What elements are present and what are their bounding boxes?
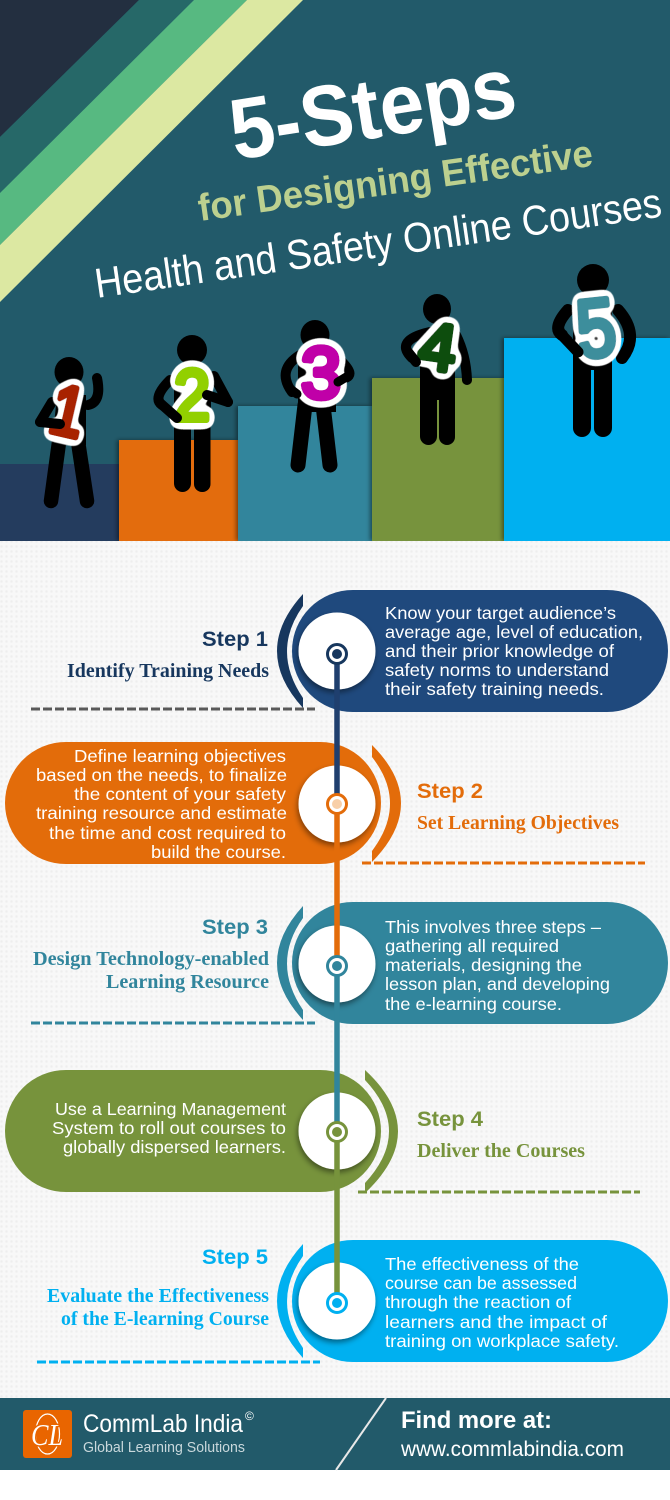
step 5 body: through the reaction of: [385, 1292, 571, 1312]
step 1 body: average age, level of education,: [385, 622, 643, 642]
find more text: [400, 1407, 624, 1461]
panel: step 3: [31, 902, 668, 1024]
panel: step 4: [5, 1070, 640, 1193]
logo: [23, 1410, 72, 1458]
step 2 body: build the course.: [151, 842, 286, 862]
step 3 subtitle: [33, 948, 269, 993]
panel: step 5: [37, 1240, 668, 1362]
step 1 subtitle: Identify Training Needs: [67, 660, 269, 682]
figure 2 holding number 2: 2: [174, 355, 210, 436]
footer band: [0, 1398, 670, 1470]
step 3 subtitle: Design Technology-enabled: [33, 948, 269, 970]
brand name: CommLab India: [83, 1410, 243, 1438]
step 3 body: the e-learning course.: [385, 994, 562, 1014]
step 5 arc: [277, 1244, 303, 1358]
step 2 subtitle: Set Learning Objectives: [417, 812, 619, 834]
step 1 heading: Step 1: [202, 628, 268, 651]
step 1 body: their safety training needs.: [385, 679, 604, 699]
step 4 heading: Step 4: [417, 1108, 483, 1131]
step 1 arc: [277, 594, 303, 708]
step 5 body: learners and the impact of: [385, 1312, 607, 1332]
step 4 subtitle: Deliver the Courses: [417, 1140, 585, 1162]
dotted content background: [0, 541, 670, 1398]
step 5 subtitle: [47, 1285, 269, 1330]
step 5 dashed rule: [37, 1360, 320, 1364]
step 3 body: This involves three steps –: [385, 917, 601, 937]
step 1 body: Know your target audience’s: [385, 603, 616, 623]
subtitle: for Designing Effective: for Designing Effective: [195, 133, 595, 230]
find more text: Find more at:: [401, 1407, 552, 1434]
step 5 body: course can be assessed: [385, 1273, 577, 1293]
panel: step 1: [31, 590, 668, 712]
step 3 body: materials, designing the: [385, 955, 582, 975]
step 3 body: lesson plan, and developing: [385, 974, 610, 994]
step 2 body: Define learning objectives: [74, 746, 286, 766]
step 4 body: [52, 1099, 286, 1157]
find more text: www.commlabindia.com: [400, 1438, 624, 1461]
step 2 heading: Step 2: [417, 780, 483, 803]
step 3 body: [385, 917, 610, 1014]
step 3 subtitle: Learning Resource: [106, 971, 269, 993]
footer slash divider: [336, 1398, 386, 1470]
step 2 dashed rule: [362, 862, 645, 864]
step 5 subtitle: of the E-learning Course: [61, 1308, 269, 1330]
step 1 dashed rule: [31, 708, 315, 710]
step 2 body: training resource and estimate: [36, 803, 287, 823]
step 4 dashed rule: [358, 1190, 640, 1194]
step 1 body: [385, 603, 643, 699]
staircase bars: [0, 338, 670, 541]
step 1 body: safety norms to understand: [385, 660, 609, 680]
figure 5 holding number 5: [558, 264, 630, 437]
step 5 body: training on workplace safety.: [385, 1331, 619, 1351]
figure 2 holding number 2: [158, 335, 228, 492]
step 4 body: globally dispersed learners.: [63, 1137, 286, 1157]
step 2 body: the content of your safety: [74, 784, 286, 804]
logo: CL: [31, 1417, 63, 1452]
figure 4 holding number 4: [406, 294, 467, 445]
step 4 body: Use a Learning Management: [55, 1099, 286, 1119]
figure 1 holding number 1: [40, 357, 98, 501]
step 5 subtitle: Evaluate the Effectiveness: [47, 1285, 269, 1307]
panel: step 2: [5, 742, 645, 864]
step 4 arc: [365, 1070, 398, 1193]
figure 3 holding number 3: 3: [301, 334, 341, 414]
step 5 body: The effectiveness of the: [385, 1254, 579, 1274]
header panel: [0, 0, 670, 541]
step 1 body: and their prior knowledge of: [385, 641, 614, 661]
step 3 arc: [277, 906, 303, 1020]
step 2 body: the time and cost required to: [49, 823, 286, 843]
step 3 body: gathering all required: [385, 936, 559, 956]
title: 5-Steps: 5-Steps: [223, 39, 522, 179]
step 2 body: [36, 746, 287, 862]
brand name: [83, 1409, 254, 1456]
step 2 arc: [372, 745, 401, 862]
timeline circles and connector: [298, 612, 376, 1340]
figure 5 holding number 5: 5: [572, 281, 620, 376]
brand name: Global Learning Solutions: [83, 1439, 245, 1456]
step 2 body: based on the needs, to finalize: [36, 765, 287, 785]
step 4 body: System to roll out courses to: [52, 1118, 286, 1138]
step 5 body: [385, 1254, 619, 1351]
figure 4 holding number 4: 4: [415, 308, 461, 386]
figure 1 holding number 1: 1: [43, 369, 93, 453]
figure 3 holding number 3: [286, 320, 349, 465]
brand name: ©: [245, 1409, 254, 1423]
step 3 heading: Step 3: [202, 916, 268, 939]
step 5 heading: Step 5: [202, 1246, 268, 1269]
step 3 dashed rule: [31, 1022, 315, 1024]
